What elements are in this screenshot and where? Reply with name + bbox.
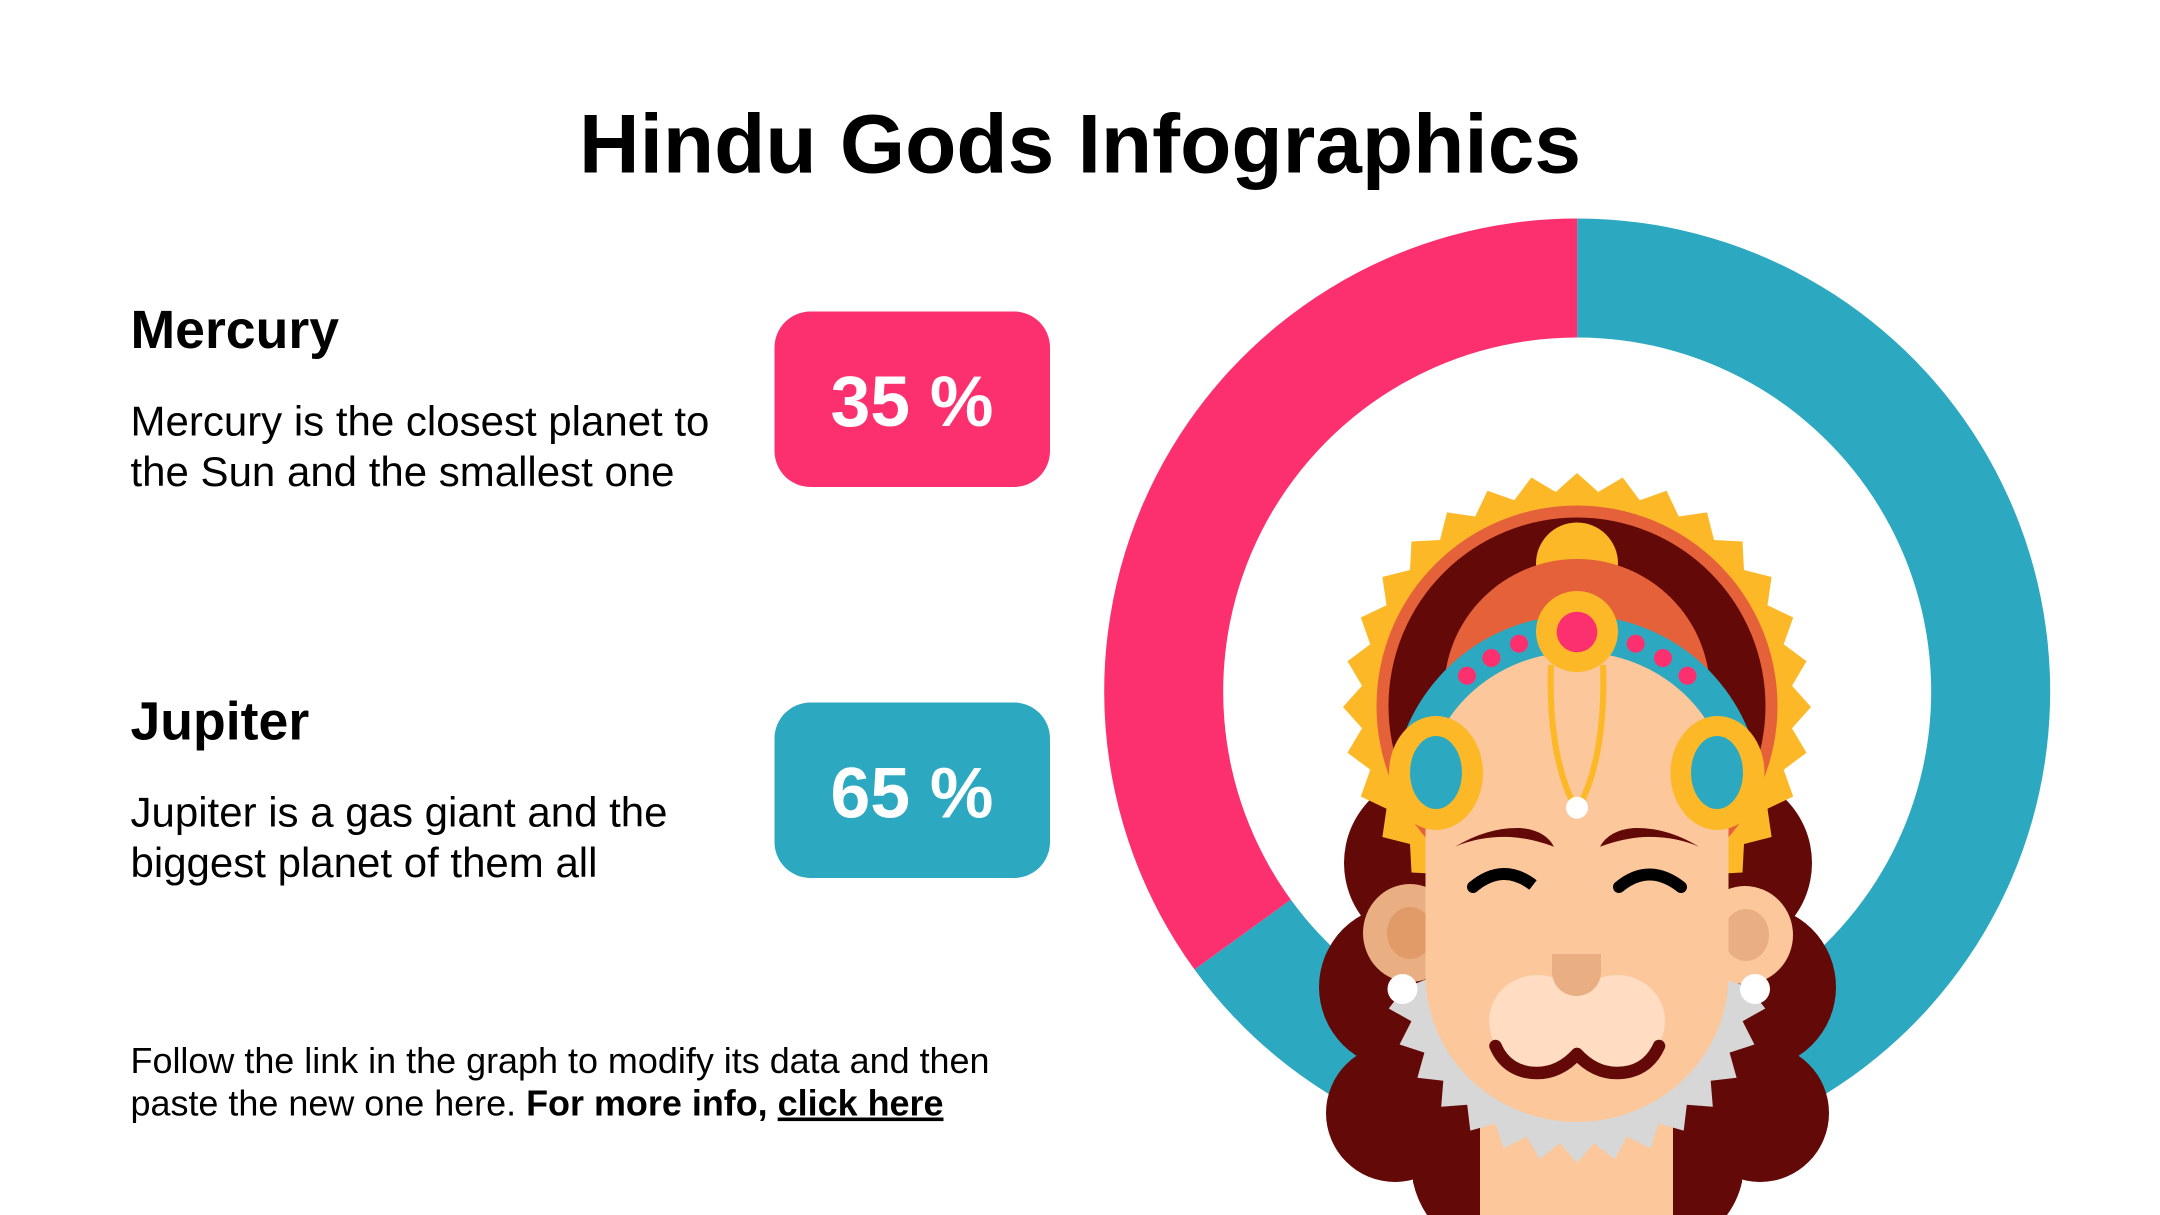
neck bbox=[1480, 1050, 1673, 1215]
panel: Mercury bbox=[130, 300, 1050, 495]
heading: Jupiter: Jupiter bbox=[130, 692, 309, 752]
right pearl earring bbox=[1740, 974, 1770, 1004]
footer note: For more info, click here bbox=[526, 1082, 943, 1124]
right ear bbox=[1697, 886, 1793, 984]
hair bbox=[1319, 773, 1836, 1215]
text: Jupiter description: Jupiter is a gas giant and the bbox=[130, 788, 668, 836]
donut segment: Jupiter 65% bbox=[1194, 218, 2050, 1164]
left ear bbox=[1363, 884, 1457, 982]
heading: Mercury: Mercury bbox=[130, 300, 339, 360]
left pearl earring bbox=[1388, 974, 1418, 1004]
face bbox=[1426, 652, 1728, 1122]
left eyebrow bbox=[1455, 828, 1554, 847]
right eye bbox=[1619, 874, 1681, 887]
collar bbox=[1389, 979, 1765, 1163]
text: Mercury description: the Sun and the smallest one bbox=[130, 448, 675, 495]
footer note: paste the new one here. bbox=[130, 1082, 526, 1124]
crown top knob bbox=[1536, 522, 1618, 604]
headband bbox=[1396, 615, 1758, 760]
crown orange dome bbox=[1444, 559, 1710, 825]
panel: Jupiter bbox=[130, 692, 1050, 886]
right temple jewel bbox=[1670, 716, 1764, 830]
text: Mercury description: Mercury is the closest planet to bbox=[130, 398, 709, 444]
nose bbox=[1552, 954, 1601, 996]
text: Jupiter description: biggest planet of them all bbox=[130, 839, 597, 886]
crown bbox=[1343, 473, 1811, 941]
crown dark inner bbox=[1388, 518, 1766, 894]
footer note: Follow the link in the graph to modify its data and then bbox=[130, 1040, 990, 1081]
title: Hindu Gods Infographics bbox=[579, 96, 1581, 190]
badge: 35 %: 35 % bbox=[831, 362, 993, 442]
badge: 65 %: 65 % bbox=[831, 754, 993, 834]
headband dots bbox=[1458, 635, 1696, 685]
right eyebrow bbox=[1600, 828, 1699, 847]
crown sun rays bbox=[1343, 473, 1811, 941]
left temple jewel bbox=[1389, 716, 1483, 830]
left eye bbox=[1467, 874, 1533, 893]
badge: 65 % bbox=[774, 702, 1050, 878]
illustration: Hindu god bbox=[1319, 473, 1836, 1215]
mustache bbox=[1489, 975, 1665, 1073]
forehead ornament bbox=[1536, 591, 1618, 819]
donut chart bbox=[1104, 218, 2050, 1164]
badge: 35 % bbox=[774, 312, 1050, 487]
donut segment: Mercury 35% bbox=[1104, 218, 1577, 970]
crown orange rim bbox=[1376, 506, 1778, 906]
